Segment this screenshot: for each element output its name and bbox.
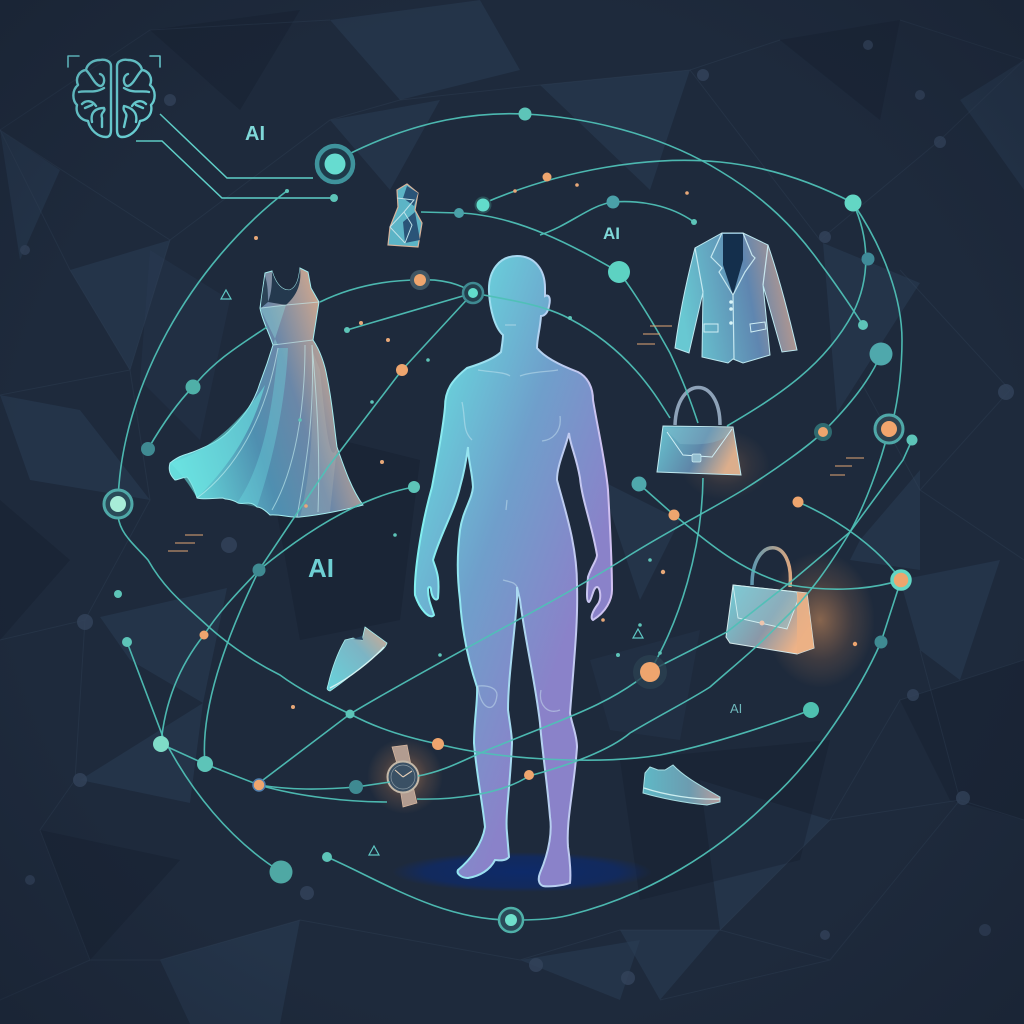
icon: watch [367,738,443,814]
small star dots [254,183,689,709]
label: AI lower-right: AI [730,701,742,716]
network nodes: orange [200,172,910,791]
icon: jacket [675,233,797,363]
triangle markers [221,290,643,855]
icon: sneaker lower [643,765,720,805]
network nodes: teal [114,108,918,884]
icon: handbag lower [726,548,875,688]
icon: sneaker upper [327,627,387,691]
connector lines from brain [136,114,334,198]
label: AI top-right: AI [603,224,620,243]
label: AI left: AI [308,553,334,583]
dash marks [168,326,864,551]
human figure [415,256,612,886]
icon: dress [169,268,363,517]
label: AI top-left: AI [245,123,265,145]
ground shadow [392,852,652,892]
network nodes: ringed [104,146,903,932]
icon: handbag upper [657,388,770,500]
icon: small garment [388,184,422,247]
network orbit lines [118,114,912,920]
icon: brain [68,56,160,137]
